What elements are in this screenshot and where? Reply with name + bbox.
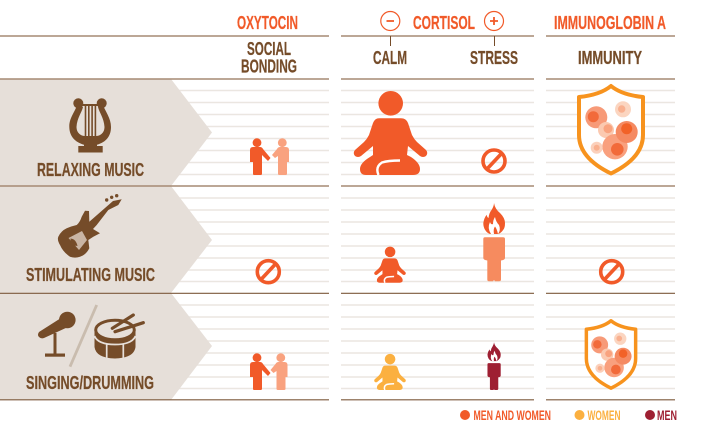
subheading: calm: CALM xyxy=(373,47,407,68)
icon: microphone xyxy=(38,312,76,357)
legend item: women xyxy=(574,407,620,423)
subheading: immunity: IMMUNITY xyxy=(578,47,642,68)
icon: small immunity shield xyxy=(586,321,636,388)
icon: small meditating figure, singing and drumming xyxy=(374,354,406,390)
legend item: men and women xyxy=(460,407,551,423)
divider slash between instruments xyxy=(70,305,97,367)
icon: no effect, oxytocin stimulating music xyxy=(257,261,279,283)
subheading: social bonding xyxy=(241,38,297,76)
icon: flaming figure, stimulating music xyxy=(483,203,505,281)
row band: singing and drumming xyxy=(0,293,212,400)
heading: oxytocin: OXYTOCIN xyxy=(237,12,298,33)
heading: immunoglobin a: IMMUNOGLOBIN A xyxy=(554,12,666,33)
row band: relaxing music xyxy=(0,79,212,186)
icon: no effect, immunity stimulating music xyxy=(601,261,623,283)
row label: singing/drumming: SINGING/DRUMMING xyxy=(26,372,154,393)
icon: plus sign xyxy=(484,12,504,30)
heading: cortisol: CORTISOL xyxy=(413,12,475,33)
legend xyxy=(460,407,677,423)
icon: large immunity shield xyxy=(579,86,643,174)
subheading: social bonding: SOCIAL xyxy=(247,38,291,59)
icon: social bonding, relaxing music xyxy=(250,138,289,175)
icon: drum xyxy=(94,315,143,359)
row label: stimulating music: STIMULATING MUSIC xyxy=(26,264,155,285)
legend item: women: WOMEN xyxy=(588,407,620,423)
legend item: men: MEN xyxy=(657,407,677,423)
icon: minus sign xyxy=(381,12,400,30)
subheading: stress: STRESS xyxy=(470,47,518,68)
legend item: men and women: MEN AND WOMEN xyxy=(474,407,551,423)
icon: lyre xyxy=(69,98,111,152)
subheading: social bonding: BONDING xyxy=(241,56,297,76)
icon: large meditating figure xyxy=(354,91,427,175)
row band: stimulating music xyxy=(0,186,212,293)
legend item: men xyxy=(645,407,677,423)
icon: small meditating figure, stimulating music xyxy=(374,247,406,283)
icon: electric guitar xyxy=(58,194,122,258)
icon: social bonding, singing and drumming xyxy=(250,353,288,390)
icon: no effect, stress relaxing music xyxy=(483,150,505,172)
icon: flaming figure, singing and drumming xyxy=(487,342,501,390)
row label: relaxing music: RELAXING MUSIC xyxy=(37,159,144,180)
